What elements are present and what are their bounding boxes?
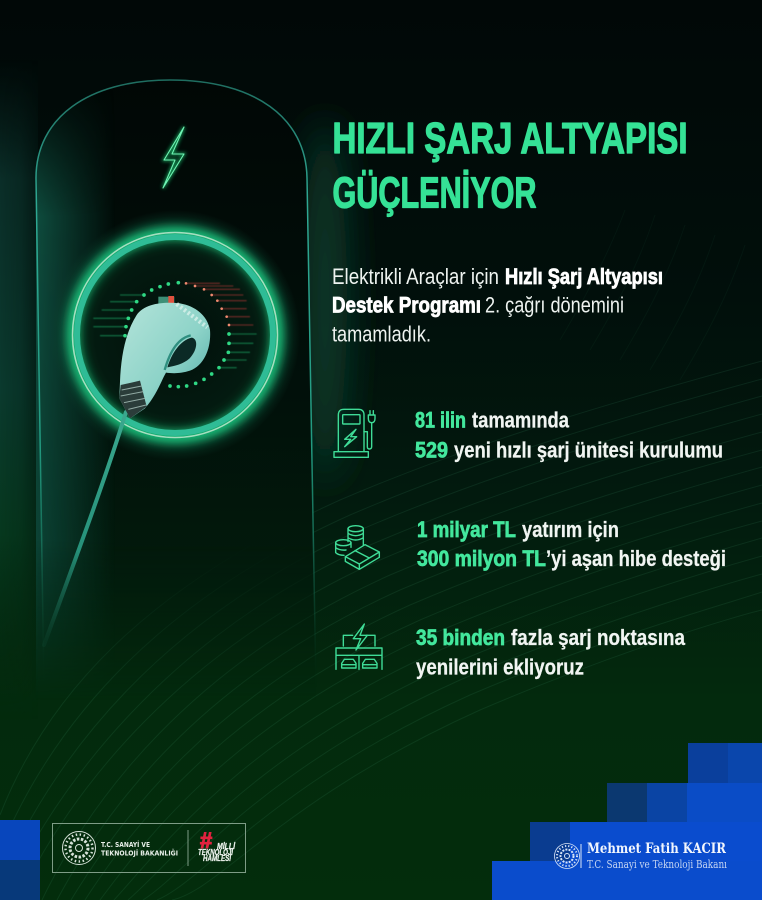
ministry name	[101, 840, 178, 858]
icon: ministry emblem	[62, 832, 96, 864]
charging ring	[50, 210, 300, 460]
text: item 3: yenilerini ekliyoruz	[416, 654, 584, 680]
ministry logo box	[52, 824, 246, 872]
title	[332, 114, 688, 218]
ministry name: T.C. SANAYİ VE	[101, 840, 150, 849]
charger body	[36, 80, 316, 700]
text: item 3	[416, 625, 686, 680]
text: item 2: ’yi aşan hibe desteği	[546, 546, 726, 571]
minister title: T.C. Sanayi ve Teknoloji Bakanı	[587, 858, 727, 871]
milli teknoloji hamlesi logo: MİLLİ	[217, 842, 236, 851]
intro paragraph: tamamladık.	[332, 322, 431, 346]
text: item 2: 300 milyon TL	[417, 546, 546, 571]
item 1: charging station	[334, 408, 723, 462]
title: GÜÇLENİYOR	[332, 168, 536, 218]
icon: neon lightning bolt	[163, 127, 184, 188]
minister name: Mehmet Fatih KACIR	[587, 841, 726, 857]
text: item 1	[415, 408, 723, 462]
text: item 1: 81 ilin	[415, 408, 466, 432]
text: item 3: fazla şarj noktasına	[511, 625, 686, 650]
icon: emblem	[554, 844, 580, 868]
milli teknoloji hamlesi logo: #	[200, 828, 212, 853]
milli teknoloji hamlesi logo	[198, 828, 236, 863]
item 3: charging points	[336, 624, 686, 680]
intro paragraph: Elektrikli Araçlar için	[332, 264, 499, 289]
icon: charging station	[334, 409, 375, 457]
blue pixel block left	[0, 820, 40, 900]
icon: charging canopy with cars	[336, 624, 382, 669]
milli teknoloji hamlesi logo: HAMLESİ	[203, 854, 232, 863]
milli teknoloji hamlesi logo: TEKNOLOJİ	[198, 848, 234, 857]
text: item 2: yatırım için	[522, 517, 619, 542]
text: item 2	[417, 517, 726, 571]
background contour lines	[0, 210, 762, 900]
LED dial	[93, 281, 257, 388]
intro paragraph	[332, 264, 663, 346]
intro paragraph: Hızlı Şarj Altyapısı	[505, 264, 663, 289]
text: item 2: 1 milyar TL	[417, 517, 516, 542]
text: item 3: 35 binden	[416, 625, 505, 650]
intro paragraph: Destek Programı	[332, 292, 481, 318]
minister signature	[554, 841, 727, 871]
text: item 1: 529	[415, 438, 448, 462]
charging plug	[119, 296, 210, 418]
icon: coins and banknotes	[336, 526, 379, 569]
intro paragraph: 2. çağrı dönemini	[485, 292, 624, 318]
item 2: money	[336, 517, 726, 571]
ministry name: TEKNOLOJİ BAKANLIĞI	[101, 848, 178, 858]
text: item 1: tamamında	[472, 408, 570, 432]
charger outline	[36, 80, 316, 690]
charging cable	[44, 412, 126, 645]
blue pixel block right	[492, 743, 762, 900]
